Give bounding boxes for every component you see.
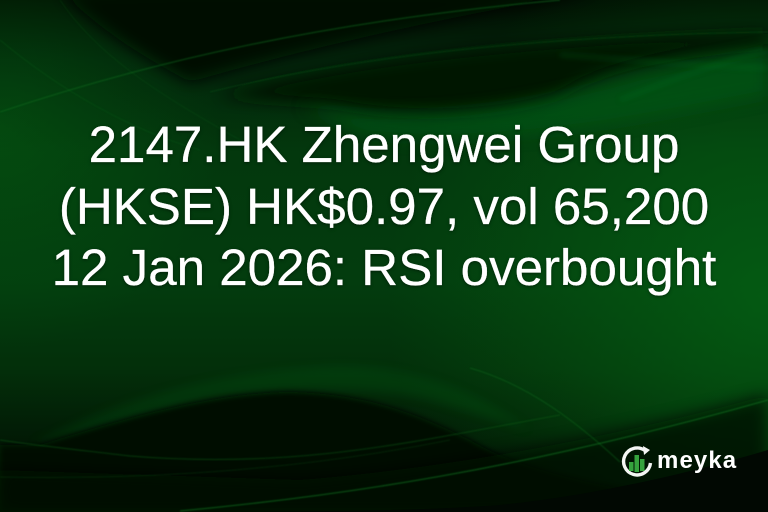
top dark swoosh <box>60 0 600 82</box>
logo: meyka <box>622 446 737 477</box>
title: 12 Jan 2026: RSI overbought <box>52 239 716 296</box>
bottom glow band above hill <box>30 366 530 445</box>
title: 2147.HK Zhengwei Group <box>89 116 679 173</box>
top curve lines <box>0 0 560 112</box>
bottom curve lines <box>0 415 560 460</box>
title <box>52 116 717 298</box>
bottom dark hill <box>0 392 768 512</box>
wordmark: meyka <box>657 447 737 474</box>
top band highlight <box>300 50 768 139</box>
icon: circular arrow with green bars <box>622 446 652 477</box>
title: (HKSE) HK$0.97, vol 65,200 <box>59 178 709 234</box>
